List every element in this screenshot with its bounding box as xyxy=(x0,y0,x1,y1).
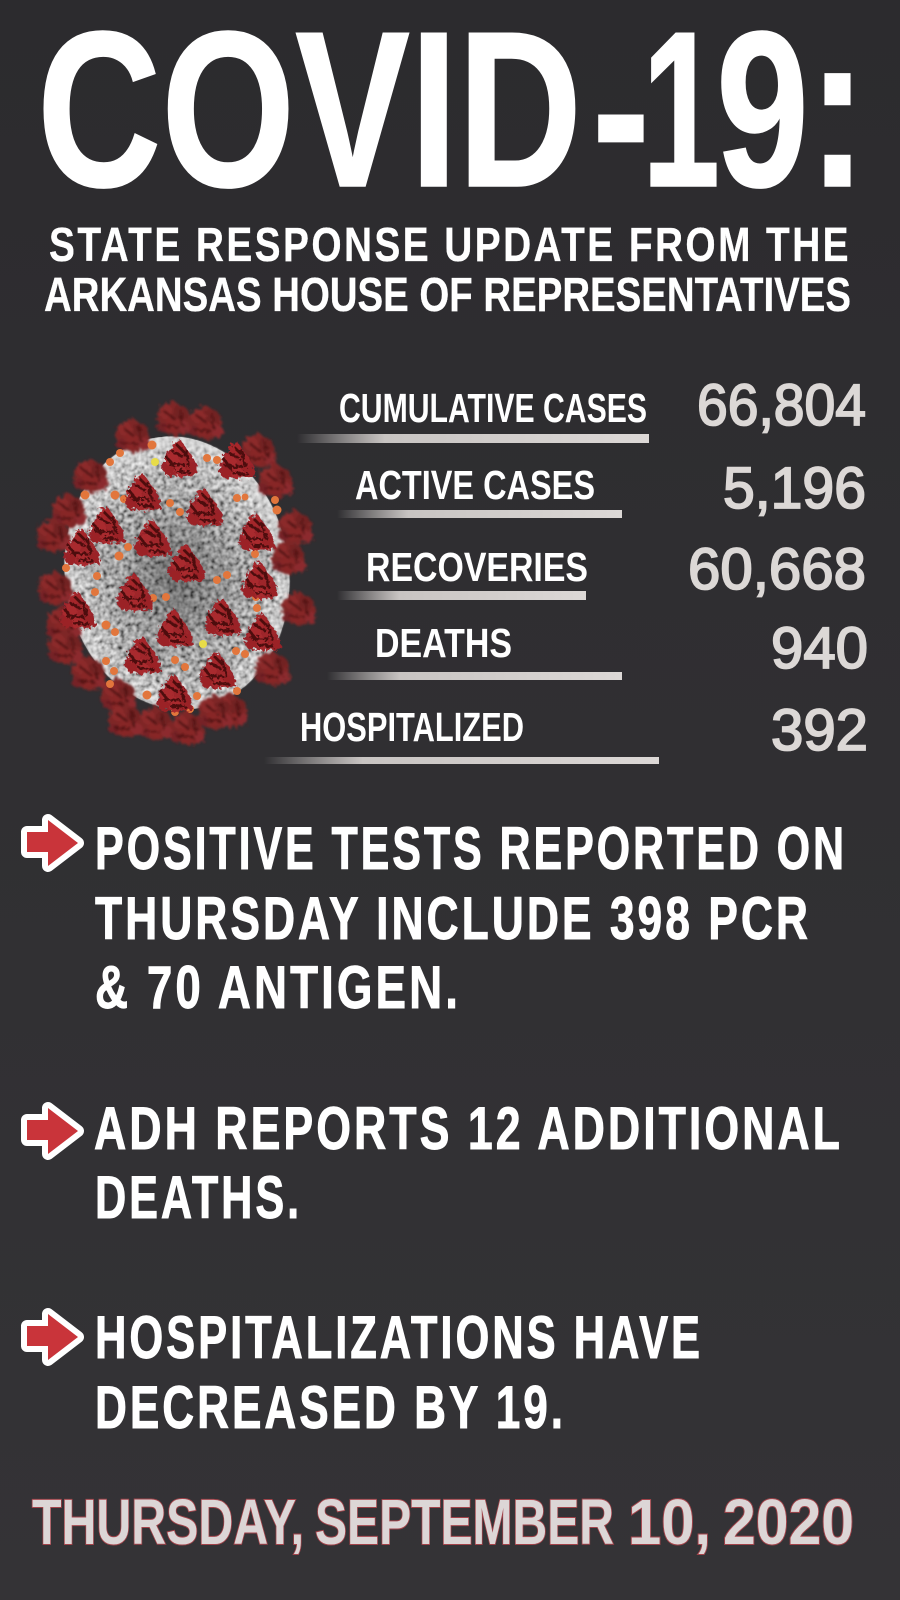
stats: recoveries xyxy=(337,537,866,602)
bullet 2 text xyxy=(94,1095,843,1231)
inner spike proteins xyxy=(59,439,281,712)
icon: arrow 1 xyxy=(27,820,78,866)
date: SEPTEMBER xyxy=(315,1486,614,1558)
icon: arrow 2 xyxy=(27,1108,78,1154)
bullet 3 text xyxy=(95,1304,703,1441)
stats: recoveries: RECOVERIES xyxy=(366,544,588,590)
bullet 3 text: DECREASED BY 19. xyxy=(95,1374,566,1441)
stats: hospitalized xyxy=(264,698,868,764)
bullet 1 text xyxy=(95,815,847,1021)
stats: hospitalized: HOSPITALIZED xyxy=(300,704,524,750)
stats: cumulative cases: CUMULATIVE CASES xyxy=(339,385,647,431)
orange surface proteins xyxy=(62,440,282,716)
date: THURSDAY, xyxy=(32,1486,304,1558)
stats: cumulative cases xyxy=(297,373,866,443)
stats: deaths: DEATHS xyxy=(375,620,512,666)
viral sphere xyxy=(47,422,307,724)
stats: active cases: ACTIVE CASES xyxy=(355,462,595,508)
date xyxy=(32,1486,854,1558)
stats: deaths xyxy=(327,616,868,681)
icon: arrow 3 xyxy=(27,1314,78,1360)
stats: active cases: 5,196 xyxy=(723,456,866,521)
stats: recoveries: 60,668 xyxy=(688,537,866,602)
yellow surface proteins xyxy=(151,458,207,648)
stats: cumulative cases: 66,804 xyxy=(697,373,866,438)
date: 10, xyxy=(628,1486,711,1558)
stats: hospitalized: 392 xyxy=(771,698,868,763)
outer spike proteins xyxy=(37,400,316,746)
bullet 2 text: DEATHS. xyxy=(95,1164,302,1231)
subtitle xyxy=(44,219,851,322)
stats: active cases xyxy=(337,456,866,521)
date: 2020 xyxy=(723,1486,854,1558)
icon: coronavirus illustration xyxy=(37,400,316,746)
stats: deaths: 940 xyxy=(771,616,868,681)
bullet 1 text: & 70 ANTIGEN. xyxy=(95,954,461,1021)
